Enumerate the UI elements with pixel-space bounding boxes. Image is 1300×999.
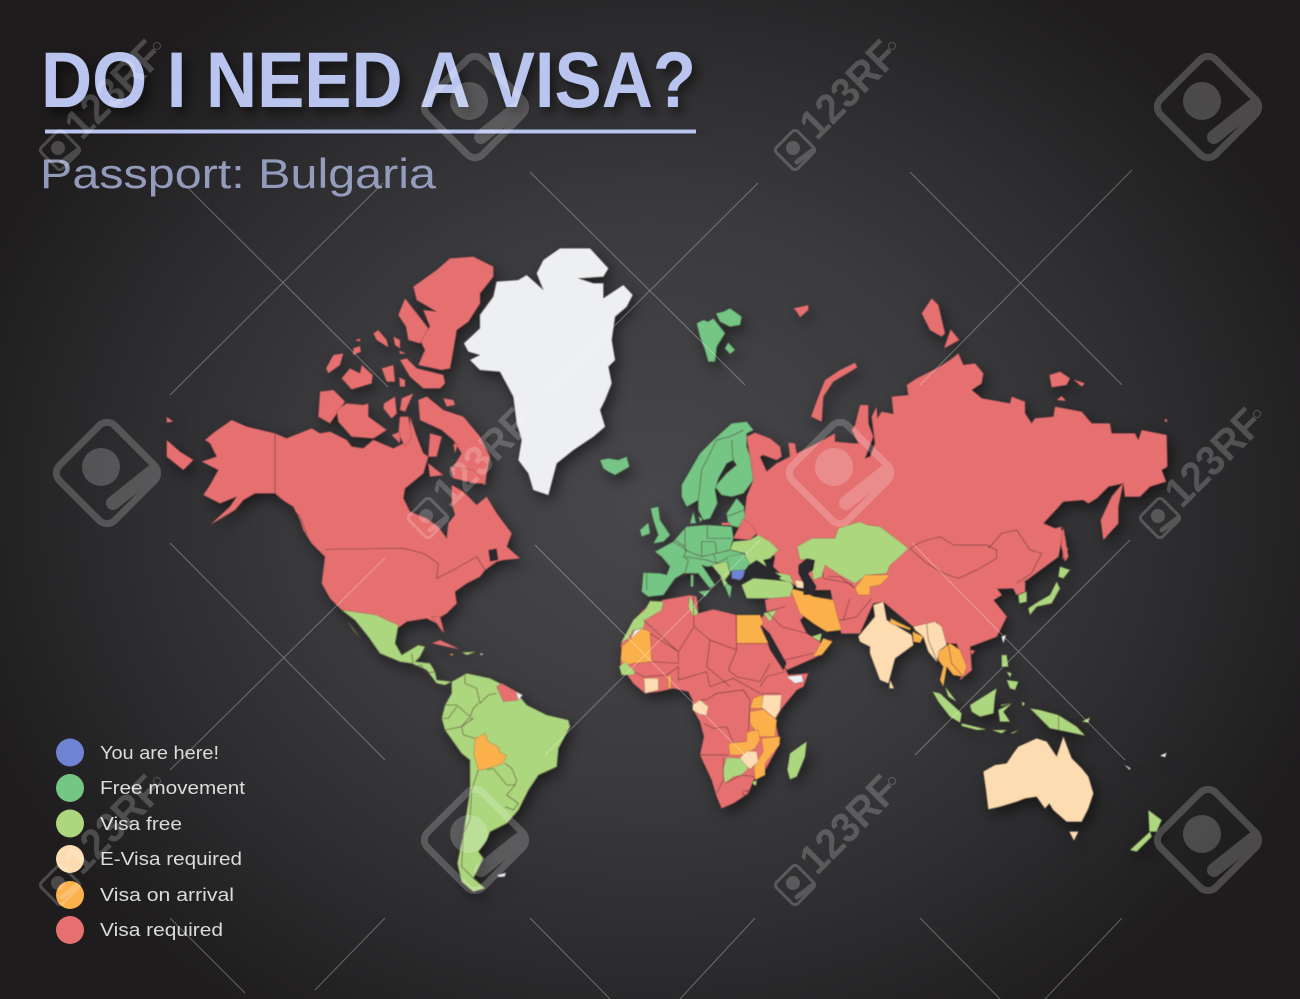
Africa: [620, 595, 808, 808]
Caspian Sea and Black Sea: [798, 558, 817, 595]
Continental EU: [642, 525, 750, 597]
Nepal: [890, 618, 911, 630]
legend: [56, 738, 245, 944]
Arabian peninsula: [758, 595, 832, 670]
Gabon: [693, 700, 708, 715]
legend item: e-visa required: [56, 845, 242, 873]
Balkans: [712, 562, 730, 580]
New Zealand: [1148, 810, 1162, 832]
Scandinavia: [682, 422, 753, 520]
Australia: [983, 737, 1093, 822]
China and neighbours: [780, 530, 1063, 680]
Iceland: [600, 457, 629, 475]
Jordan area: [763, 610, 777, 622]
Senegal: [619, 662, 635, 675]
Ireland: [640, 523, 650, 537]
Bangladesh: [913, 632, 923, 643]
diagonal light lines: [170, 170, 1132, 999]
map: Russia and Arctic Asia: [744, 298, 1167, 590]
legend item: free movement: Free movement: [100, 778, 245, 798]
Svalbard: [697, 308, 742, 362]
legend item: visa on arrival: [56, 881, 234, 909]
Somalia north: [787, 675, 803, 683]
Madagascar: [787, 742, 807, 779]
Thailand, Laos and Cambodia: [938, 643, 967, 687]
Africa borders: [643, 620, 678, 652]
legend item: visa required: [56, 916, 223, 944]
Morocco: [621, 601, 663, 643]
map: Central America and Mexico: [342, 610, 570, 892]
Iran: [790, 588, 842, 632]
Mauritania: [621, 628, 652, 665]
Denmark: [690, 512, 696, 523]
Kyrgyzstan and Tajikistan: [855, 575, 890, 595]
Caucasus: [770, 572, 793, 583]
Southeast Asian islands: [1002, 635, 1006, 643]
Tunisia: [688, 595, 698, 617]
legend item: visa free: [56, 810, 182, 838]
Botswana: [722, 757, 748, 783]
Greenland: [464, 248, 633, 495]
legend item: visa required: Visa required: [100, 920, 223, 940]
Bulgaria: [732, 570, 745, 580]
Ukraine: [730, 535, 778, 567]
Oman: [813, 638, 832, 657]
Western Sahara: [628, 628, 642, 643]
subtitle: Passport: Bulgaria: [40, 150, 437, 197]
legend item: visa free: Visa free: [100, 814, 182, 834]
map: North America: [167, 248, 633, 633]
Japan and South Korea: [1028, 582, 1060, 615]
title underline: [45, 130, 696, 134]
India: [858, 602, 913, 683]
South America: [442, 673, 570, 892]
East Africa: [750, 695, 763, 708]
map: Africa and Middle East: [600, 457, 842, 808]
legend item: visa on arrival: Visa on arrival: [100, 885, 234, 905]
map: Asia south: [780, 522, 1167, 852]
Côte d'Ivoire: [644, 678, 658, 693]
Belarus: [733, 518, 757, 540]
Kazakhstan: [797, 522, 908, 583]
legend item: you are here: [56, 738, 219, 766]
map: Europe: [640, 422, 793, 598]
Turkey: [742, 578, 793, 598]
UK: [651, 507, 670, 543]
legend item: e-visa required: E-Visa required: [100, 849, 242, 869]
world map: [167, 248, 1167, 892]
title: DO I NEED A VISA?: [41, 35, 696, 124]
Canada, USA and Alaska: [167, 257, 520, 633]
legend item: you are here: You are here!: [100, 743, 219, 763]
Baltics: [727, 498, 745, 527]
legend item: free movement: [56, 774, 245, 802]
Egypt: [737, 615, 768, 643]
